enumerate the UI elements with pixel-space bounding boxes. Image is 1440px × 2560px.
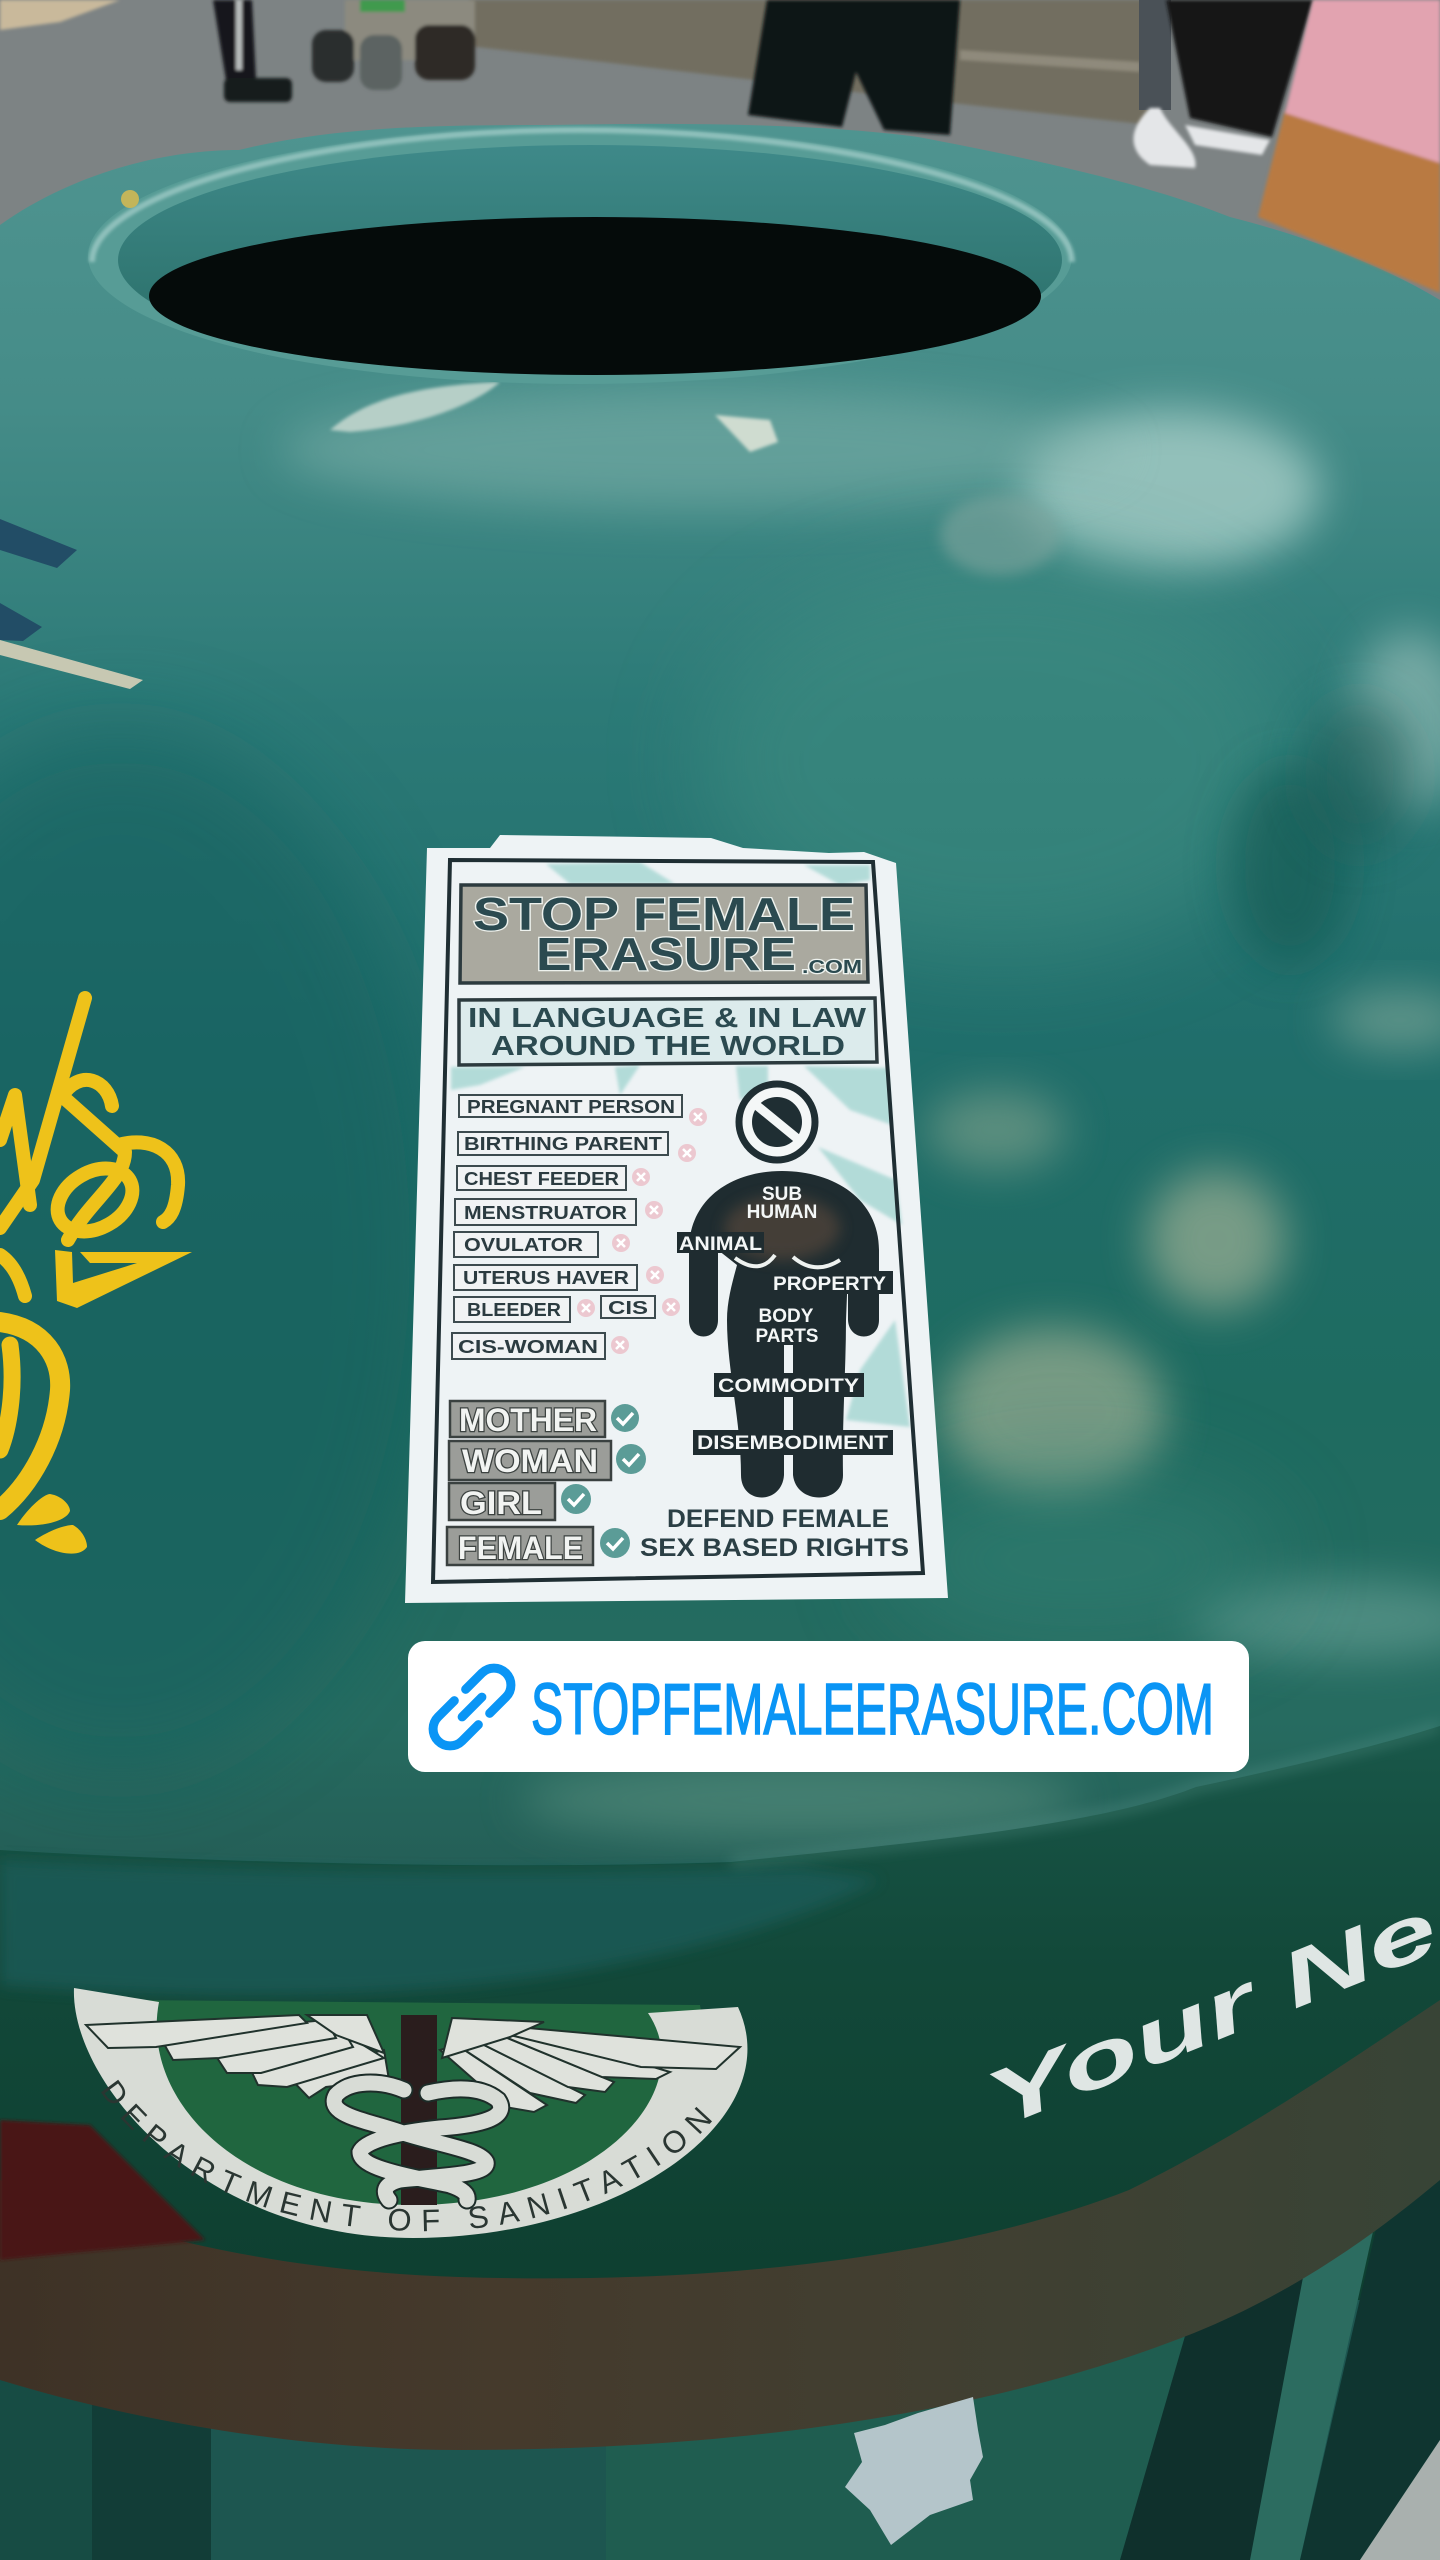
sticker inner border bbox=[433, 860, 923, 1582]
teal reflection on the band bbox=[0, 1860, 880, 1995]
lettering on the band: Your Ne bbox=[973, 1883, 1440, 2144]
term: bleeder: BLEEDER bbox=[467, 1300, 561, 1320]
marks at left edge of dome bbox=[0, 519, 143, 689]
term: chest feeder bbox=[457, 1166, 626, 1190]
check bbox=[600, 1528, 630, 1558]
term: woman: WOMAN bbox=[462, 1443, 598, 1479]
term: cis-woman bbox=[452, 1333, 605, 1359]
slogan line one: DEFEND FEMALE bbox=[667, 1505, 889, 1533]
person: dark trousers bbox=[1166, 0, 1313, 137]
term: girl bbox=[449, 1483, 555, 1521]
cross bbox=[646, 1266, 664, 1284]
emblem white ring bbox=[74, 1988, 747, 2238]
person: left leg and shoe bbox=[213, 0, 292, 102]
label: disembodiment bbox=[693, 1430, 893, 1455]
red paint patch bbox=[0, 2120, 205, 2260]
crease highlight bbox=[731, 1726, 1440, 1862]
subtitle line two: AROUND THE WORLD bbox=[491, 1030, 845, 1061]
cross bbox=[645, 1201, 663, 1219]
term: female: FEMALE bbox=[458, 1530, 583, 1566]
label: disembodiment: DISEMBODIMENT bbox=[697, 1433, 888, 1454]
term: menstruator: MENSTRUATOR bbox=[464, 1203, 627, 1223]
cross bbox=[632, 1168, 650, 1186]
person: black trousers bbox=[748, 0, 960, 135]
term: mother: MOTHER bbox=[459, 1402, 597, 1438]
droplets bbox=[17, 1494, 70, 1525]
term: ovulator: OVULATOR bbox=[464, 1235, 583, 1255]
icon: chain link bbox=[426, 1661, 518, 1753]
title line one: STOP FEMALE bbox=[473, 888, 855, 940]
rolling cart bbox=[312, 0, 475, 90]
term: birthing parent: BIRTHING PARENT bbox=[464, 1134, 662, 1154]
label: body parts: BODY bbox=[759, 1306, 814, 1327]
term: bleeder bbox=[454, 1297, 570, 1322]
subtitle box bbox=[459, 998, 877, 1065]
term: uterus haver bbox=[454, 1265, 637, 1290]
rejected terms list bbox=[452, 1095, 707, 1359]
cross bbox=[689, 1108, 707, 1126]
arm and pink shirt of passer-by bbox=[1258, 0, 1440, 293]
slogan line two: SEX BASED RIGHTS bbox=[640, 1534, 909, 1562]
shirt bbox=[1285, 0, 1440, 163]
step edge bbox=[960, 50, 1140, 72]
inner wall bbox=[118, 145, 1062, 375]
pavement at bottom right bbox=[1360, 2440, 1440, 2560]
label: animal: ANIMAL bbox=[679, 1234, 762, 1255]
title suffix: .COM bbox=[802, 957, 862, 977]
right wing bbox=[440, 2018, 740, 2112]
check bbox=[611, 1404, 639, 1432]
term: chest feeder: CHEST FEEDER bbox=[464, 1169, 619, 1189]
department of sanitation emblem bbox=[74, 1988, 748, 2238]
cross bbox=[577, 1299, 595, 1317]
label: sub human: HUMAN bbox=[747, 1202, 817, 1223]
term: cis bbox=[601, 1296, 655, 1318]
term: girl: GIRL bbox=[460, 1485, 542, 1521]
yellow graffiti tag bbox=[0, 998, 192, 1554]
background: pavement and people behind the bin bbox=[0, 0, 1440, 360]
emblem lettering: DEPARTMENT OF SANITATION bbox=[101, 2080, 712, 2232]
title line two: ERASURE bbox=[536, 928, 796, 980]
cross bbox=[678, 1144, 696, 1162]
white sneakers bbox=[1134, 108, 1270, 168]
affirmed terms list bbox=[447, 1401, 646, 1566]
emblem green field bbox=[118, 2000, 702, 2215]
rusty rim bbox=[0, 2000, 1440, 2450]
term: cis-woman: CIS-WOMAN bbox=[458, 1337, 598, 1357]
term: cis: CIS bbox=[608, 1298, 648, 1318]
yellow crumb bbox=[121, 190, 139, 208]
label: sub human: SUB bbox=[762, 1184, 802, 1205]
chest shading bbox=[724, 1196, 840, 1260]
icon: prohibition sign bbox=[739, 1084, 815, 1160]
lower band of the bin bbox=[0, 1726, 1440, 2300]
check bbox=[561, 1484, 591, 1514]
cross bbox=[612, 1234, 630, 1252]
title box bbox=[460, 885, 868, 983]
label: commodity: COMMODITY bbox=[718, 1376, 859, 1397]
term: uterus haver: UTERUS HAVER bbox=[463, 1268, 629, 1288]
label: property: PROPERTY bbox=[773, 1274, 886, 1295]
subtitle line one: IN LANGUAGE & IN LAW bbox=[468, 1002, 867, 1033]
term: pregnant person: PREGNANT PERSON bbox=[467, 1097, 675, 1117]
pointed tail of tag bbox=[55, 1250, 192, 1308]
lower body slats of the bin bbox=[0, 2160, 1440, 2560]
person: grey trouser leg bbox=[1139, 0, 1171, 110]
slogan bbox=[640, 1505, 909, 1562]
dome lighting patches bbox=[0, 390, 1440, 1840]
check bbox=[616, 1444, 646, 1474]
term: menstruator bbox=[455, 1199, 636, 1225]
link sticker bbox=[408, 1641, 1249, 1772]
sticker paper bbox=[405, 835, 948, 1603]
label: body parts: PARTS bbox=[756, 1326, 818, 1347]
left wing bbox=[86, 2015, 389, 2098]
scuffs on the dome bbox=[330, 382, 1060, 575]
label: commodity bbox=[714, 1373, 864, 1397]
female figure silhouette bbox=[677, 1171, 893, 1498]
term: ovulator bbox=[454, 1232, 598, 1257]
term: birthing parent bbox=[458, 1132, 668, 1155]
cross bbox=[611, 1336, 629, 1354]
staff bbox=[401, 2015, 437, 2205]
eucalyptus leaves bbox=[451, 862, 910, 1427]
cross bbox=[662, 1298, 680, 1316]
sunlit corner bbox=[0, 0, 120, 30]
dome of the bin bbox=[0, 124, 1440, 1900]
opening bbox=[149, 217, 1041, 375]
stone steps bbox=[460, 0, 1150, 125]
rim and hole of the bin bbox=[88, 128, 1072, 384]
arm bbox=[1258, 110, 1440, 293]
sticker bbox=[405, 835, 948, 1603]
chest arcs bbox=[735, 1255, 840, 1267]
torn paper scrap bbox=[845, 2397, 983, 2545]
serpents bbox=[334, 2083, 501, 2200]
